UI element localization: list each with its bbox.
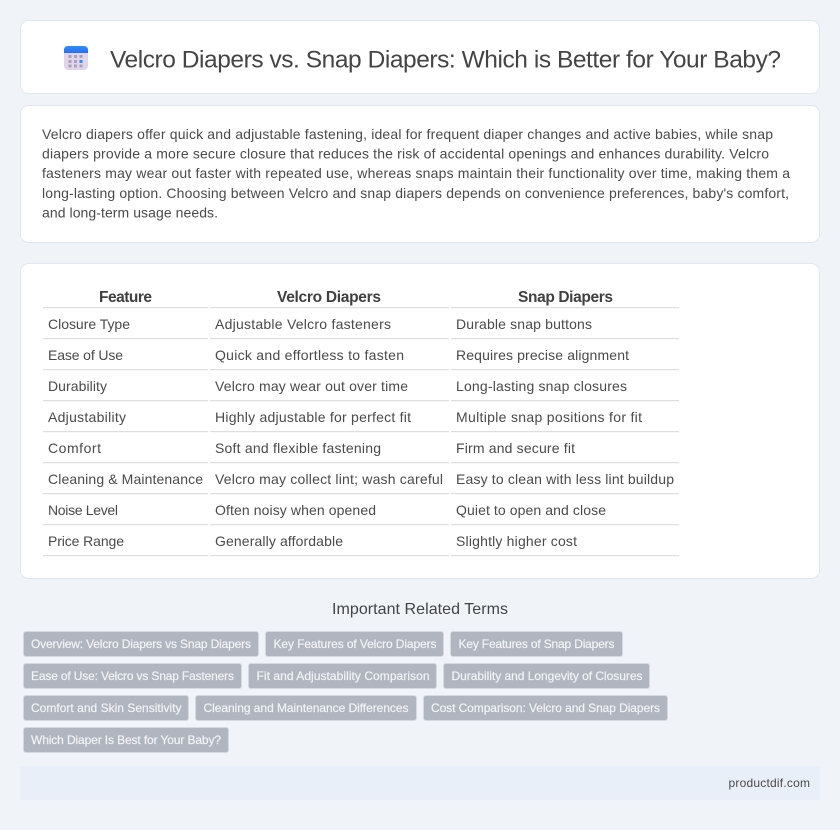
table row: price range: Generally affordable (215, 533, 343, 549)
tag: which diaper (24, 728, 228, 752)
table row: adjustability: Multiple snap positions for fit (456, 409, 642, 425)
table header row: Feature (99, 289, 152, 306)
intro text block: Velcro diapers offer quick and adjustable fastening, ideal for frequent diaper changes and active babies, while snap (42, 126, 773, 142)
table row: cleaning and maintenance (43, 471, 679, 494)
tag: which diaper: Which Diaper Is Best for Your Baby? (31, 733, 221, 747)
footer source: productdif.com (728, 776, 810, 790)
table row: noise level (43, 502, 679, 525)
table row: noise level: Quiet to open and close (456, 502, 606, 518)
tag: comfort (24, 696, 188, 720)
footer bar (20, 766, 820, 800)
table row: ease of use: Requires precise alignment (456, 347, 629, 363)
table row: closure type (43, 316, 679, 339)
table row: durability (43, 378, 679, 401)
panel: intro paragraph (20, 106, 820, 242)
header panel (20, 20, 820, 94)
title: Velcro Diapers vs. Snap Diapers: Which is Better for Your Baby? (110, 46, 781, 74)
table row: durability: Durability (48, 378, 107, 394)
intro text block: fasteners may wear out faster with repeated use, whereas snaps maintain their functionality over time, making them a (42, 165, 790, 181)
table row: ease of use: Quick and effortless to fasten (215, 347, 404, 363)
tag: overview (24, 632, 258, 656)
table row: price range: Slightly higher cost (456, 533, 577, 549)
table row: adjustability: Adjustability (48, 409, 126, 425)
tag: durability: Durability and Longevity of Closures (452, 669, 642, 683)
intro text block: long-lasting option. Choosing between Velcro and snap diapers depends on convenience preferences, baby's comfort, (42, 185, 789, 201)
table row: noise level: Noise Level (48, 502, 118, 518)
tag: cost: Cost Comparison: Velcro and Snap Diapers (431, 701, 660, 715)
table row: price range: Price Range (48, 533, 124, 549)
table row: ease of use: Ease of Use (48, 347, 123, 363)
table row: ease of use (43, 347, 679, 370)
intro text block: and long-term usage needs. (42, 204, 218, 220)
table header row: Snap Diapers (518, 289, 613, 306)
table row: cleaning and maintenance: Cleaning & Maintenance (48, 471, 203, 487)
tag: key features of velcro (266, 632, 444, 656)
tag: ease of use (24, 664, 242, 688)
table row: cleaning and maintenance: Easy to clean with less lint buildup (456, 471, 674, 487)
heading: important related terms: Important Related Terms (332, 601, 508, 618)
icon: calendar (64, 46, 88, 70)
table row: comfort: Soft and flexible fastening (215, 440, 381, 456)
table row: adjustability: Highly adjustable for perfect fit (215, 409, 411, 425)
tag: cleaning: Cleaning and Maintenance Differences (204, 701, 408, 715)
intro text block (42, 126, 790, 220)
tag: overview: Overview: Velcro Diapers vs Snap Diapers (31, 637, 251, 651)
tag: fit and adjustability: Fit and Adjustability Comparison (256, 669, 430, 683)
table row: noise level: Often noisy when opened (215, 502, 376, 518)
tag: key features of snap: Key Features of Snap Diapers (458, 637, 614, 651)
table row: durability: Velcro may wear out over time (215, 378, 408, 394)
tag: durability (444, 664, 650, 688)
panel: comparison table (20, 264, 820, 578)
table header row: Velcro Diapers (277, 289, 381, 306)
table row: comfort: Firm and secure fit (456, 440, 575, 456)
table row: durability: Long-lasting snap closures (456, 378, 627, 394)
tag: comfort: Comfort and Skin Sensitivity (31, 701, 182, 715)
tag: ease of use: Ease of Use: Velcro vs Snap Fasteners (31, 669, 234, 683)
intro text block: diapers provide a more secure closure that reduces the risk of accidental openings and enhances durability. Velcro (42, 146, 769, 162)
table row: comfort (43, 440, 679, 463)
tag: key features of velcro: Key Features of Velcro Diapers (274, 637, 436, 651)
table row: cleaning and maintenance: Velcro may collect lint; wash careful (215, 471, 443, 487)
table row: closure type: Durable snap buttons (456, 316, 592, 332)
table row: price range (43, 533, 679, 556)
table row: closure type: Adjustable Velcro fasteners (215, 316, 391, 332)
tag: cost (424, 696, 668, 720)
table row: adjustability (43, 409, 679, 432)
tag: key features of snap (450, 632, 622, 656)
table row: comfort: Comfort (48, 440, 101, 456)
tag: cleaning (196, 696, 416, 720)
table row: closure type: Closure Type (48, 316, 130, 332)
table header row (43, 289, 679, 308)
related terms tags (24, 632, 668, 752)
tag: fit and adjustability (248, 664, 436, 688)
